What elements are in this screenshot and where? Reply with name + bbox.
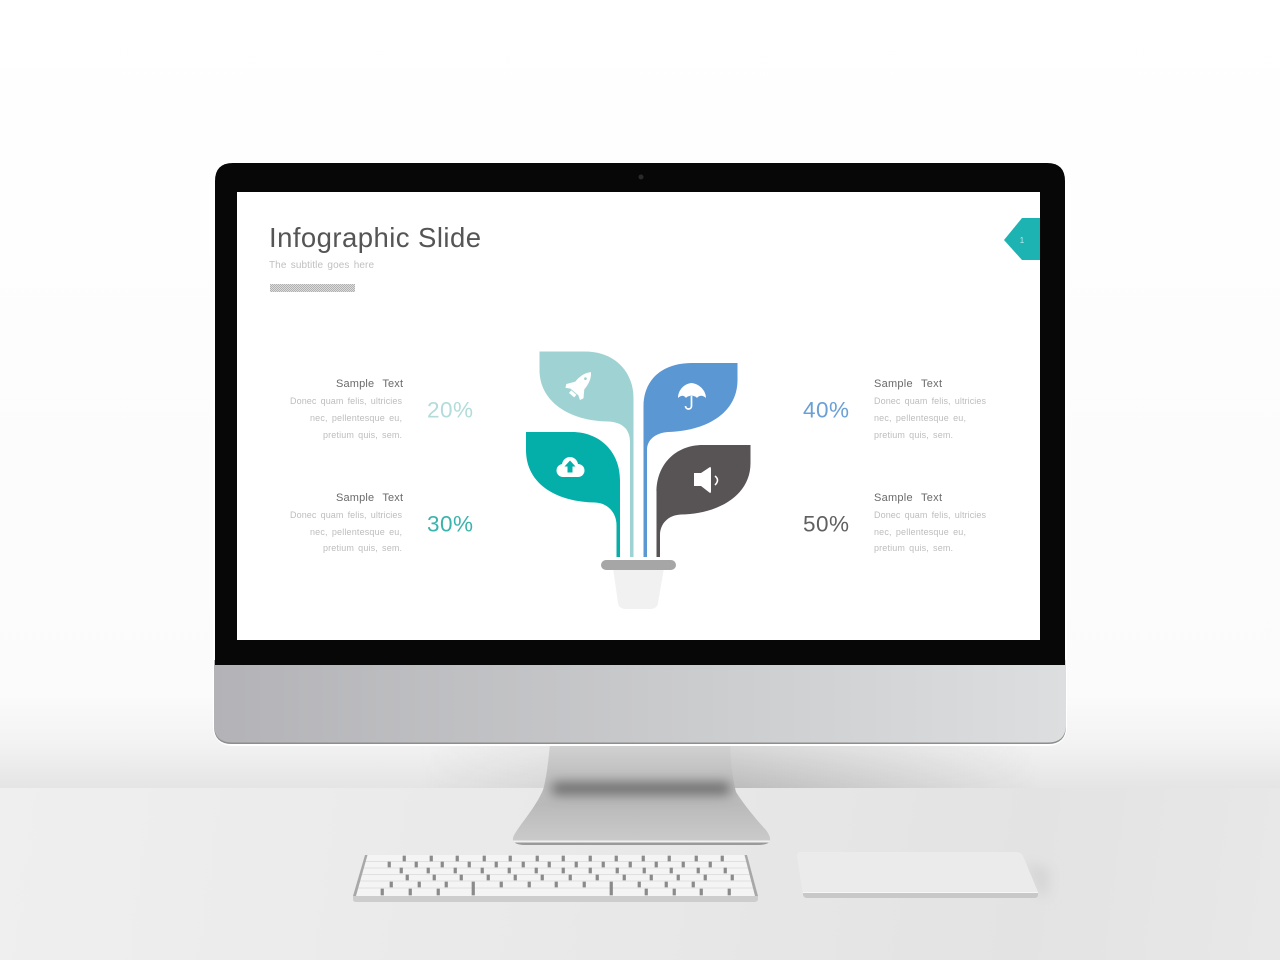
percentage 20%: 20% (427, 398, 473, 422)
title: Infographic Slide (269, 222, 481, 253)
webcam (638, 174, 644, 180)
text block: 30%: Donec quam felis, ultricies (290, 510, 402, 520)
leaf: dark grey with speaker (656, 445, 750, 557)
text block: 40% (874, 378, 986, 440)
icon: rocket (563, 365, 600, 402)
keyboard body (353, 855, 758, 896)
text block: 20%: pretium quis, sem. (323, 430, 402, 440)
text block: 30%: pretium quis, sem. (323, 543, 402, 553)
text block: 50%: nec, pellentesque eu, (874, 527, 966, 537)
keyboard edges (353, 855, 368, 896)
icon: cloud upload (556, 457, 584, 477)
text block: 20% (290, 378, 403, 440)
monitor stand (510, 744, 775, 846)
text block: 40%: pretium quis, sem. (874, 430, 953, 440)
monitor bezel (215, 163, 1065, 665)
leaf: teal with cloud (526, 432, 620, 557)
text block: 30%: nec, pellentesque eu, (310, 527, 402, 537)
leaf: blue with umbrella (644, 363, 738, 557)
text block: 50% (874, 492, 986, 553)
text block: 40%: nec, pellentesque eu, (874, 413, 966, 423)
icon: speaker (694, 467, 718, 493)
text block: 40%: Sample Text (874, 378, 942, 390)
icon: umbrella (678, 383, 706, 409)
monitor highlight rim (213, 162, 1067, 746)
keyboard (353, 855, 758, 902)
monitor chin (214, 660, 1066, 744)
text block: 40%: Donec quam felis, ultricies (874, 396, 986, 406)
trackpad cast shadow (1024, 863, 1050, 896)
hatched title underline (270, 284, 355, 292)
text block: 20%: nec, pellentesque eu, (310, 413, 402, 423)
leaf: light teal with rocket (540, 352, 634, 557)
trackpad surface (797, 852, 1038, 898)
text block: 30% (290, 492, 403, 553)
screen (237, 192, 1040, 640)
trackpad (797, 852, 1050, 898)
text block: 20%: Sample Text (336, 378, 403, 390)
subtitle: The subtitle goes here (269, 260, 374, 271)
key row lines (357, 862, 756, 888)
text block: 20%: Donec quam felis, ultricies (290, 396, 402, 406)
flower pot rim (601, 560, 676, 570)
percentage 30%: 30% (427, 512, 473, 536)
page number tab: 1 (1020, 236, 1025, 245)
text block: 50%: Sample Text (874, 492, 942, 504)
trackpad edge (803, 893, 1038, 898)
key gaps (381, 856, 734, 895)
percentage 40%: 40% (803, 398, 849, 422)
text block: 30%: Sample Text (336, 492, 403, 504)
page number tab (1004, 218, 1040, 260)
percentage 50%: 50% (803, 512, 849, 536)
plant infographic (526, 352, 750, 609)
text block: 50%: pretium quis, sem. (874, 543, 953, 553)
flower pot body (613, 568, 664, 609)
monitor (213, 162, 1067, 746)
text block: 50%: Donec quam felis, ultricies (874, 510, 986, 520)
